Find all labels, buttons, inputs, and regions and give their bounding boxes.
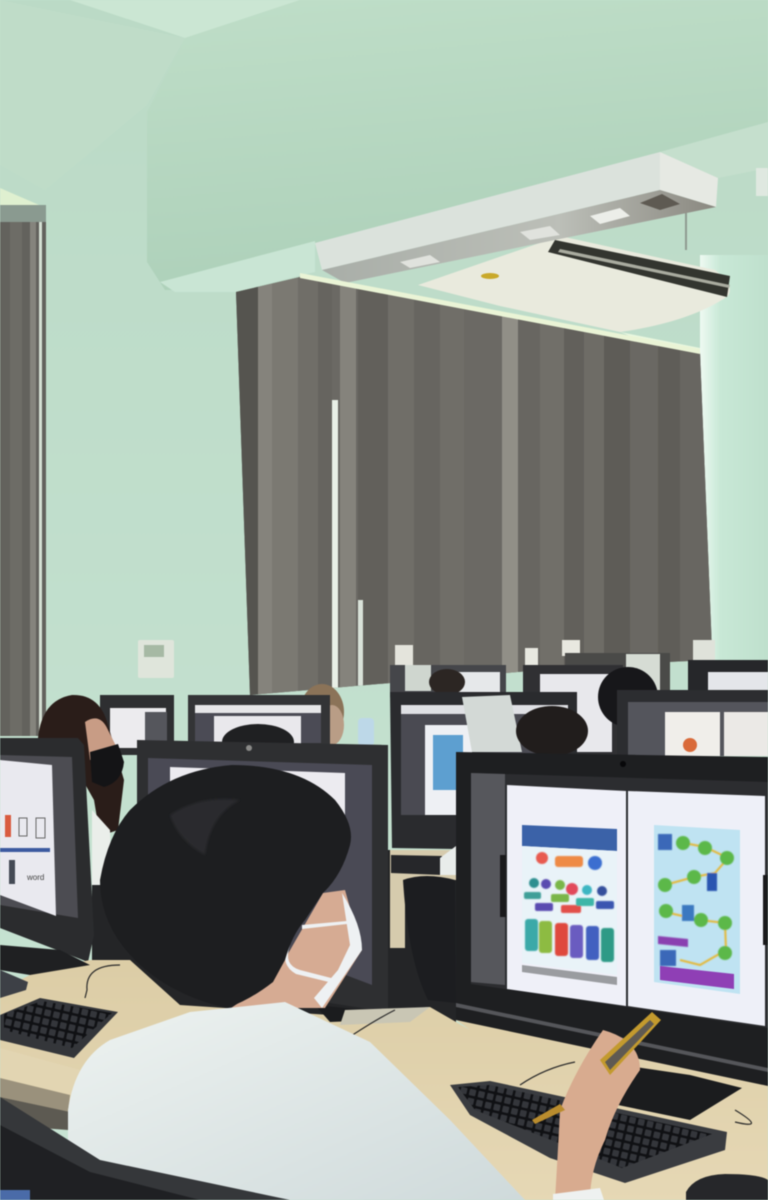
bottle row — [525, 919, 614, 962]
blue divider bar on left screen — [0, 848, 50, 852]
green path nodes — [658, 834, 734, 966]
back row monitors — [390, 640, 768, 755]
label: word on left screen: word — [26, 873, 44, 882]
shirt cuff — [553, 1188, 604, 1200]
ceiling light fixture — [315, 152, 718, 283]
icon: flow boxes on left screen — [19, 818, 45, 838]
poster footer — [522, 965, 617, 985]
main student: forearm and hand — [555, 1030, 640, 1200]
screen side handles — [500, 855, 506, 917]
monitor stand mat — [340, 1007, 430, 1025]
webcam — [620, 761, 626, 767]
dark under-desk background — [92, 850, 456, 1030]
computer mouse — [686, 1174, 768, 1200]
bright strip above blinds — [300, 273, 700, 354]
monitor stand and small keyboard left — [0, 945, 90, 998]
flow chart nodes — [524, 852, 614, 913]
main student: face mask — [285, 893, 362, 1008]
smartphone — [532, 1012, 661, 1124]
icon: person on left screen — [5, 815, 11, 837]
student with black mask — [38, 695, 124, 885]
large center monitor — [137, 740, 388, 1022]
icon: person silhouette on left screen — [9, 860, 15, 884]
purple footer — [660, 966, 734, 989]
seated students behind — [300, 667, 658, 745]
screen page: right — [628, 791, 765, 1026]
main student: hair — [100, 765, 351, 1008]
thermostat on wall — [138, 640, 174, 678]
poster panel — [654, 825, 740, 994]
cables — [85, 965, 752, 1124]
left curtain — [0, 222, 46, 736]
chair — [403, 876, 456, 1003]
middle row monitor left — [100, 695, 174, 755]
poster header — [522, 825, 617, 851]
desks — [0, 960, 768, 1200]
foreground monitor, bottom left — [0, 1097, 290, 1200]
middle row monitor far right — [617, 690, 768, 756]
soffit box — [147, 0, 768, 292]
middle row monitor center — [188, 695, 330, 760]
left foreground monitor — [0, 738, 94, 962]
water bottle — [358, 718, 374, 746]
main student: neck and face — [225, 890, 362, 1012]
keyboard left — [0, 998, 118, 1058]
keyboard and desk behind — [390, 846, 456, 948]
keyboard right — [450, 1081, 727, 1183]
center vertical blinds — [230, 270, 720, 710]
large right monitor — [456, 752, 768, 1086]
air conditioner — [418, 210, 730, 354]
middle row monitor right with infographic — [390, 692, 588, 850]
poster body — [522, 846, 617, 975]
right monitor stand — [618, 1065, 742, 1120]
screen page: left — [507, 785, 626, 1006]
main student: shirt — [68, 1002, 525, 1200]
